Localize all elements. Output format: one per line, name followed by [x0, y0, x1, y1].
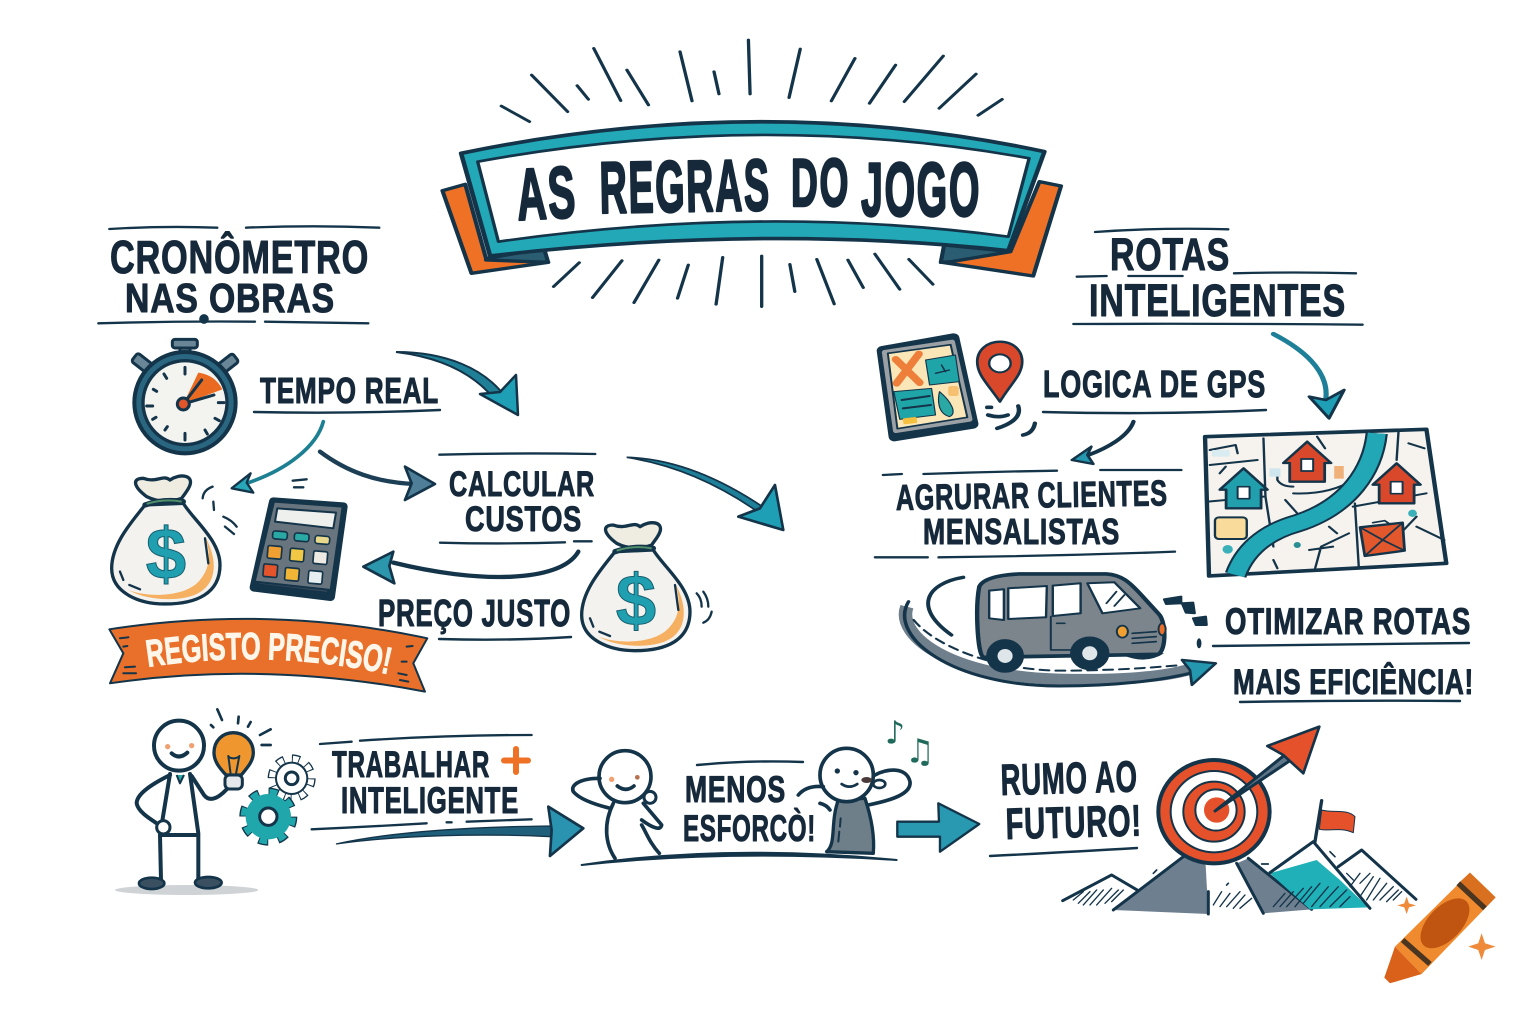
label: menos esforco: MENOS — [685, 769, 786, 810]
sticky note — [1215, 517, 1247, 539]
icon: stopwatch — [131, 339, 239, 453]
ground line — [582, 853, 897, 865]
label: logica de gps: LOGICA DE GPS — [1043, 364, 1266, 406]
label: logica de gps — [1043, 364, 1266, 413]
label: preco justo: PREÇO JUSTO — [378, 593, 571, 635]
banner: registo preciso — [108, 618, 428, 693]
arrow: to calcular custos — [320, 452, 435, 500]
person left — [573, 751, 662, 858]
briefcase — [1360, 521, 1405, 556]
heading: inteligentes: INTELIGENTES — [1089, 275, 1346, 326]
heading: rotas: ROTAS — [1110, 229, 1230, 280]
icon: location pin — [977, 342, 1035, 435]
icon: van on road — [905, 574, 1216, 686]
title banner — [442, 40, 1061, 307]
arrow: back to calculator — [363, 552, 578, 583]
target — [1158, 760, 1270, 863]
label: agrupar clientes mensalistas: MENSALISTAS — [923, 511, 1120, 552]
arrow: to centre — [627, 457, 783, 530]
icon: calculator — [254, 479, 343, 597]
music notes: ♪ — [885, 715, 905, 751]
title text — [515, 145, 981, 236]
label: tempo real: TEMPO REAL — [260, 370, 439, 411]
icon: crayon — [1384, 873, 1496, 983]
illustration: relaxed people — [573, 715, 935, 865]
label: rumo ao futuro: FUTURO! — [1005, 796, 1142, 849]
arrow: to menos esforco — [336, 807, 583, 856]
label: calcular custos: CALCULAR — [449, 465, 595, 504]
icon: money bag left — [112, 476, 237, 604]
sparkle large — [1468, 933, 1496, 960]
banner: registo preciso: REGISTO PRECISO! — [146, 632, 392, 674]
title rays — [501, 40, 1002, 307]
title text: AS — [515, 152, 579, 236]
heading: cronometro: CRONÔMETRO — [110, 231, 369, 283]
light bulb — [211, 709, 271, 789]
arrow: to centre top — [396, 352, 518, 415]
arrow: to map — [1273, 334, 1344, 418]
label: rumo ao futuro — [990, 752, 1142, 856]
icon: stick person with bulb and gears — [115, 709, 311, 895]
flag — [1315, 801, 1355, 842]
gear white — [272, 759, 311, 798]
icon: tablet — [882, 338, 973, 437]
icon: orange plus — [504, 749, 528, 772]
title text: REGRAS — [599, 145, 771, 229]
illustration: target and mountains — [1063, 727, 1416, 914]
illustration: relaxed people: ♫ — [905, 732, 935, 771]
target arrow — [1215, 727, 1319, 811]
icon: money bag right — [582, 523, 712, 651]
panel: rotas inteligentes — [875, 229, 1474, 702]
label: menos esforco: ESFORCÒ! — [683, 807, 816, 849]
icon: money bag right: $ — [616, 560, 656, 641]
label: rumo ao futuro: RUMO AO — [1000, 752, 1138, 805]
title text: JOGO — [861, 148, 981, 233]
house teal — [1220, 468, 1267, 508]
label: agrupar clientes mensalistas — [875, 470, 1181, 557]
label: agrupar clientes mensalistas: AGRURAR CLIENTES — [895, 472, 1168, 518]
map streets — [1208, 430, 1444, 568]
arrow: to rumo ao futuro — [897, 803, 979, 852]
ribbon shape — [442, 122, 1061, 276]
gear teal — [245, 793, 292, 840]
label: trabalhar + inteligente: INTELIGENTE — [341, 780, 519, 821]
icon: money bag left: $ — [146, 513, 186, 594]
road — [906, 607, 1190, 680]
title text: DO — [791, 145, 850, 221]
label: menos esforco — [683, 761, 816, 849]
person right — [827, 798, 874, 853]
mountains — [1063, 842, 1416, 914]
house red 1 — [1283, 442, 1331, 482]
heading: nas obras: NAS OBRAS — [125, 275, 335, 321]
house red 2 — [1373, 463, 1420, 503]
icon: city map — [1205, 429, 1446, 576]
label: calcular custos — [439, 453, 595, 543]
panel: trabalhar mais inteligente — [115, 709, 1496, 983]
label: calcular custos: CUSTOS — [465, 500, 582, 539]
label: trabalhar + inteligente — [312, 735, 532, 829]
arrow: to money bag — [232, 422, 323, 493]
arrow: to agrupar clientes — [1072, 422, 1133, 464]
sparkle small — [1397, 897, 1416, 914]
label: trabalhar + inteligente: TRABALHAR — [332, 744, 490, 785]
van body — [977, 574, 1164, 657]
panel: cronometro nas obras — [97, 225, 785, 693]
